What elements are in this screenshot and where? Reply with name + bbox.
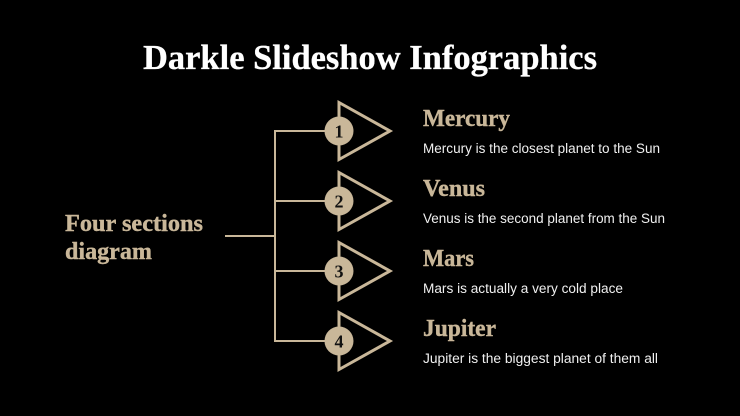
heading: four sections diagram (65, 211, 203, 265)
section 4 marker: 4 (334, 332, 344, 352)
section 2 marker (324, 172, 390, 230)
section text: Venus: Venus (423, 176, 485, 202)
section 3 marker (324, 242, 390, 300)
heading: four sections diagram: diagram (65, 239, 152, 265)
section 1 marker (324, 102, 390, 160)
section 2 marker: 2 (334, 192, 344, 212)
section text: Mercury: Mercury (423, 106, 510, 132)
section 3 marker: 3 (334, 262, 344, 282)
section text: Mars: Mars (423, 246, 474, 272)
section text: Jupiter: Jupiter (423, 316, 496, 342)
section text: Mars (423, 246, 623, 296)
section text: Mars: Mars is actually a very cold place (423, 281, 623, 296)
tree connector lines (225, 130, 339, 342)
section text: Venus (423, 176, 665, 226)
section text: Jupiter: Jupiter is the biggest planet of them all (423, 351, 658, 366)
heading: four sections diagram: Four sections (65, 211, 203, 237)
title: Darkle Slideshow Infographics (143, 38, 597, 77)
section text: Venus: Venus is the second planet from the Sun (423, 211, 665, 226)
section text: Jupiter (423, 316, 658, 366)
section text: Mercury: Mercury is the closest planet to the Sun (423, 141, 660, 156)
section text: Mercury (423, 106, 660, 156)
section 1 marker: 1 (334, 122, 344, 142)
section 4 marker (324, 312, 390, 370)
